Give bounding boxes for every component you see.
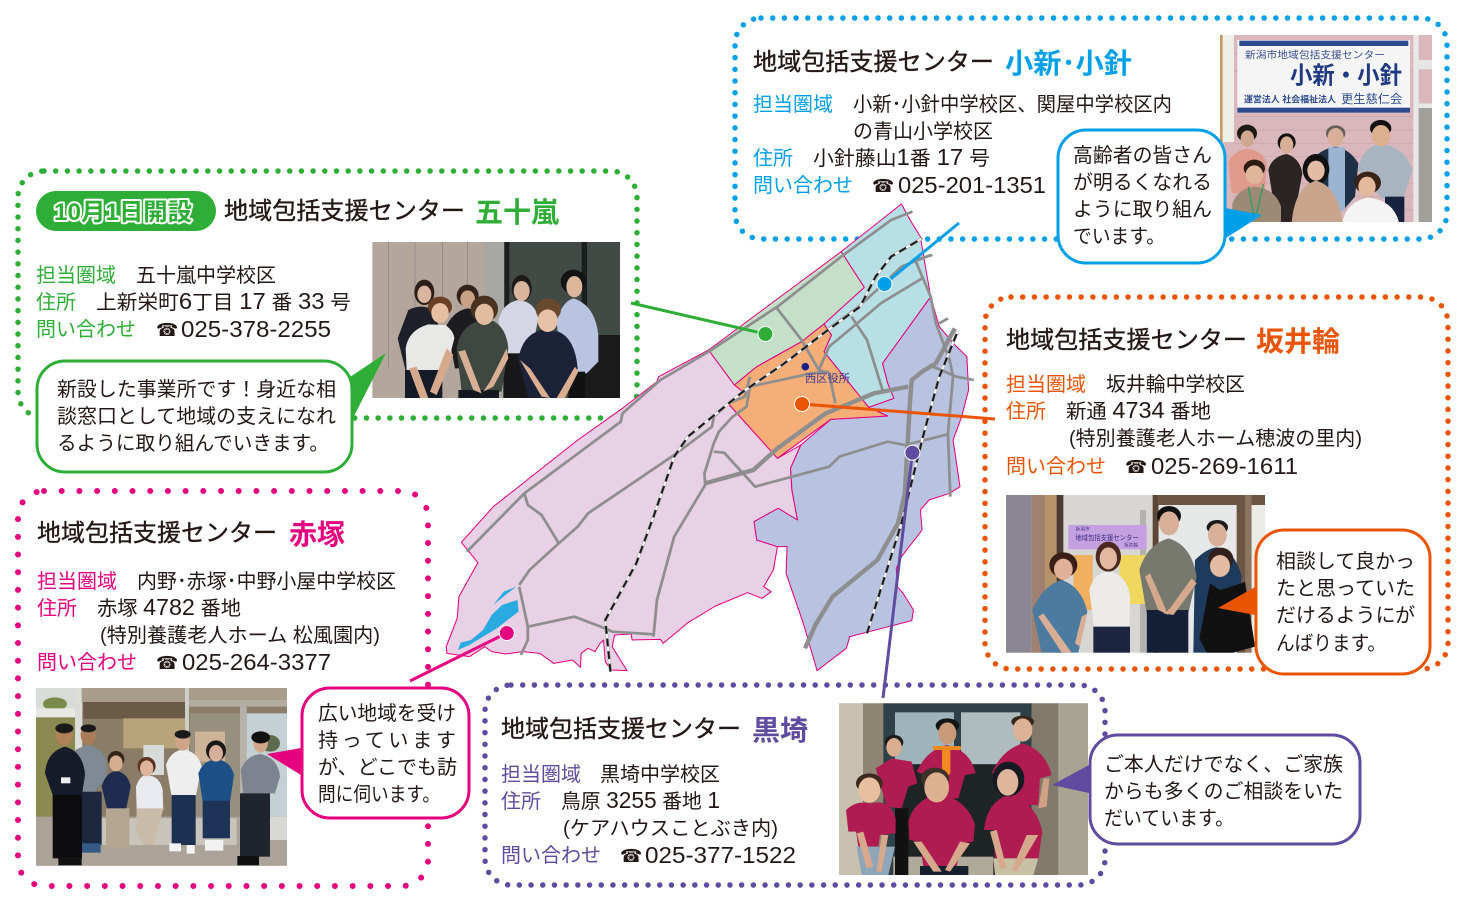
callout: 五十嵐	[37, 353, 386, 472]
details: 赤塚: ☎	[156, 653, 178, 674]
panel: 坂井輪	[985, 297, 1448, 674]
details: 五十嵐: 問い合わせ	[36, 318, 136, 341]
heading: 黒埼: 地域包括支援センター	[501, 716, 741, 743]
map area: 黒埼	[754, 297, 969, 671]
details: 坂井輪	[1006, 373, 1362, 479]
details: 赤塚: 問い合わせ	[37, 651, 137, 674]
callout: 小新・小針: が明るくなれる	[1073, 171, 1212, 194]
heading: 五十嵐: 地域包括支援センター	[224, 198, 465, 225]
details: 赤塚	[37, 570, 396, 675]
details: 坂井輪: 住所	[1006, 400, 1046, 423]
map area: 小新・小針	[824, 204, 931, 407]
details: 五十嵐: ☎	[156, 320, 178, 341]
photo: 小新・小針 staff and sign: 更生慈仁会	[1341, 92, 1403, 106]
photo: 五十嵐 staff	[372, 242, 620, 398]
details: 五十嵐: 025-378-2255	[181, 316, 331, 342]
details: 小新・小針	[753, 93, 1172, 198]
details: 坂井輪: 坂井輪中学校区	[1106, 373, 1245, 396]
heading: 小新・小針	[753, 48, 1132, 79]
callout: 小新・小針: でいます。	[1073, 226, 1165, 248]
details: 坂井輪: 担当圏域	[1006, 373, 1086, 396]
heading: 赤塚	[37, 519, 345, 550]
photo: 小新・小針 staff and sign: 運営法人 社会福祉法人	[1244, 94, 1336, 105]
details: 小新・小針: 小新･小針中学校区、関屋中学校区内	[853, 93, 1172, 116]
heading: 赤塚: 赤塚	[289, 519, 345, 550]
details: 五十嵐: 五十嵐中学校区	[136, 264, 276, 287]
details: 赤塚: (特別養護老人ホーム 松風園内)	[100, 624, 380, 647]
panel: 黒埼	[485, 685, 1360, 885]
map marker: 西区役所	[802, 363, 850, 385]
details: 小新・小針: 住所	[753, 147, 793, 170]
panel: 赤塚	[18, 491, 469, 886]
heading: 赤塚: 地域包括支援センター	[37, 520, 277, 547]
callout: 黒埼: からも多くのご相談をいた	[1104, 780, 1343, 803]
details: 五十嵐: 担当圏域	[36, 264, 116, 287]
details: 黒埼: 025-377-1522	[645, 842, 796, 868]
connector: 黒埼	[883, 445, 920, 698]
photo: 赤塚 staff	[36, 688, 287, 866]
photo: 坂井輪 staff	[1006, 495, 1265, 653]
callout: 赤塚: 持っています	[318, 729, 456, 752]
callout: 五十嵐: 談窓口として地域の支えになれ	[57, 405, 336, 428]
details: 小新・小針: 小針藤山1番 17 号	[813, 144, 990, 170]
callout: 小新・小針	[1058, 130, 1262, 263]
map marker: 西区役所: 西区役所	[805, 371, 850, 385]
callout: 黒埼	[1052, 735, 1360, 844]
heading: 黒埼: 黒埼	[752, 715, 808, 746]
details: 坂井輪: 問い合わせ	[1006, 455, 1106, 478]
details: 赤塚: 赤塚 4782 番地	[97, 594, 241, 620]
callout: 赤塚: 問に伺います。	[318, 783, 440, 806]
photo: 坂井輪 staff: 地域包括支援センター	[1075, 533, 1139, 542]
details: 小新・小針: ☎	[872, 176, 894, 197]
details: 黒埼: ☎	[620, 846, 642, 867]
photo: 小新・小針 staff and sign: 新潟市地域包括支援センター	[1245, 49, 1385, 62]
callout: 黒埼: ご本人だけでなく、ご家族	[1104, 753, 1343, 776]
details: 小新・小針: 担当圏域	[753, 93, 833, 116]
details: 坂井輪: (特別養護老人ホーム穂波の里内)	[1069, 427, 1362, 450]
photo: 坂井輪 staff: 坂井輪	[1124, 542, 1138, 549]
heading: 五十嵐: 五十嵐	[475, 197, 559, 228]
details: 黒埼: 担当圏域	[501, 763, 581, 786]
details: 黒埼	[501, 763, 796, 868]
details: 坂井輪: 025-269-1611	[1151, 453, 1298, 479]
details: 五十嵐: 上新栄町6丁目 17 番 33 号	[96, 288, 351, 314]
details: 小新・小針: の青山小学校区	[853, 120, 993, 143]
callout: 坂井輪: んばります。	[1276, 632, 1386, 655]
callout: 五十嵐: 新設した事業所です！身近な相	[57, 378, 336, 401]
photo: 黒埼 staff	[839, 703, 1088, 875]
map: railway	[605, 238, 958, 672]
heading: 五十嵐	[224, 197, 559, 228]
heading: 坂井輪: 坂井輪	[1256, 326, 1340, 357]
map area: 坂井輪	[729, 324, 888, 458]
callout: 小新・小針: 高齢者の皆さん	[1073, 144, 1212, 167]
callout: 小新・小針: ように取り組ん	[1073, 198, 1212, 221]
panel: 小新・小針	[735, 18, 1447, 263]
details: 赤塚: 025-264-3377	[182, 649, 331, 675]
heading: 坂井輪	[1006, 326, 1340, 357]
connector: 五十嵐	[631, 303, 773, 342]
details: 五十嵐	[36, 264, 351, 342]
callout: 赤塚	[267, 688, 469, 818]
details: 赤塚: 内野･赤塚･中野小屋中学校区	[137, 570, 396, 593]
photo: 小新・小針 staff and sign	[1220, 35, 1432, 222]
map: roads	[467, 212, 974, 655]
badge: 10月1日開設: 10月1日開設	[54, 199, 192, 226]
details: 黒埼: 黒埼中学校区	[600, 763, 720, 786]
map: 西区	[446, 204, 974, 672]
details: 黒埼: 問い合わせ	[501, 844, 601, 867]
map: lake	[458, 587, 519, 650]
callout: 黒埼: だいています。	[1104, 808, 1234, 830]
map area: 五十嵐	[709, 252, 864, 385]
panel: 五十嵐	[18, 171, 637, 472]
badge: 10月1日開設	[36, 191, 216, 231]
heading: 小新・小針: 小新･小針	[1005, 48, 1132, 79]
details: 赤塚: 住所	[37, 597, 77, 620]
callout: 五十嵐: るように取り組んでいきます。	[57, 432, 329, 455]
connector: 赤塚	[410, 626, 514, 681]
heading: 小新・小針: 地域包括支援センター	[753, 49, 994, 76]
details: 小新・小針: 025-201-1351	[898, 172, 1046, 198]
details: 黒埼: (ケアハウスことぶき内)	[563, 817, 778, 840]
connector: 坂井輪	[794, 396, 995, 419]
callout: 坂井輪: 相談して良かっ	[1276, 550, 1415, 573]
callout: 坂井輪: たと思っていた	[1276, 578, 1415, 600]
callout: 赤塚: 広い地域を受け	[318, 702, 456, 725]
details: 黒埼: 住所	[501, 790, 541, 813]
callout: 坂井輪	[1218, 530, 1430, 674]
details: 小新・小針: 問い合わせ	[753, 174, 853, 197]
details: 黒埼: 鳥原 3255 番地 1	[561, 787, 720, 813]
details: 坂井輪: 新通 4734 番地	[1066, 397, 1211, 423]
callout: 赤塚: が、どこでも訪	[318, 756, 457, 779]
details: 坂井輪: ☎	[1125, 457, 1147, 478]
heading: 坂井輪: 地域包括支援センター	[1006, 327, 1247, 354]
map area: 西区 west district	[446, 350, 801, 671]
connector: 小新・小針	[877, 223, 959, 292]
callout: 坂井輪: だけるようにが	[1276, 604, 1415, 627]
details: 赤塚: 担当圏域	[37, 570, 117, 593]
photo: 坂井輪 staff: 新潟市	[1076, 526, 1090, 533]
photo: 小新・小針 staff and sign: 小新・小針	[1290, 62, 1402, 89]
details: 五十嵐: 住所	[36, 291, 76, 314]
heading: 黒埼	[501, 715, 808, 746]
